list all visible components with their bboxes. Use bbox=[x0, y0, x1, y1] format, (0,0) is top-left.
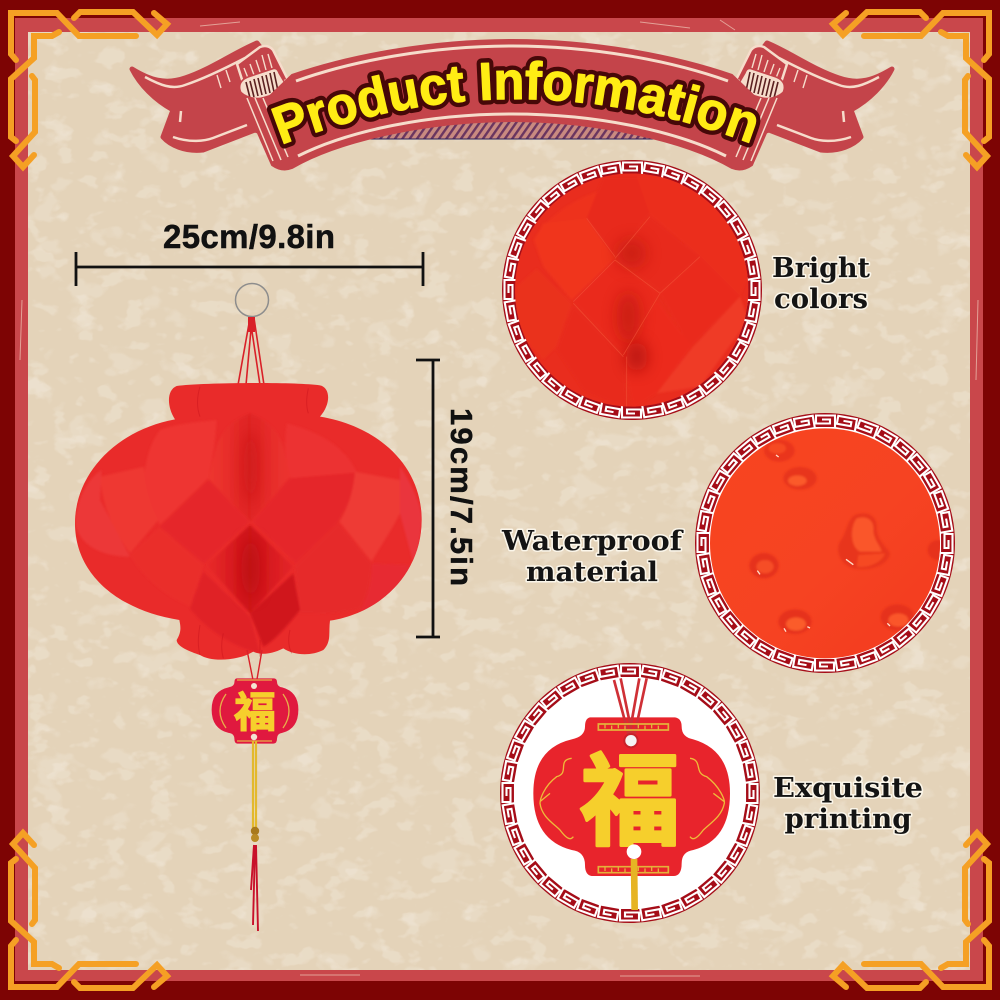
width dimension: line and label: 25cm/9.8in bbox=[163, 218, 335, 255]
corner ornament: top left bbox=[11, 12, 167, 167]
title arc path bbox=[281, 99, 755, 145]
lantern bottom skirt folds bbox=[197, 387, 308, 658]
gold tassel cord bbox=[253, 741, 256, 828]
detail circle: exquisite printing bbox=[500, 663, 760, 923]
scroll ornaments bbox=[540, 758, 724, 839]
height dimension: line and label: 19cm/7.5in bbox=[444, 408, 479, 586]
label: waterproof material bbox=[501, 526, 685, 588]
gold beads bbox=[251, 827, 259, 842]
key pattern ring bbox=[502, 160, 762, 420]
title ribbon banner bbox=[130, 39, 894, 176]
honeycomb closeup bbox=[513, 173, 750, 410]
key strips bbox=[598, 724, 668, 873]
ribbon main band bbox=[240, 40, 784, 169]
title text: Product Information bbox=[271, 60, 756, 144]
label: bright colors: colors bbox=[774, 284, 868, 315]
label: bright colors: Bright bbox=[772, 253, 871, 284]
droplets bbox=[749, 440, 949, 634]
red tassel bbox=[251, 845, 258, 931]
white inner disc bbox=[515, 678, 745, 908]
bottom hole bbox=[627, 844, 641, 859]
ribbon shadow hatch bbox=[370, 120, 654, 139]
small fortune tag with tassel bbox=[212, 650, 298, 931]
top hole bbox=[624, 734, 638, 747]
corner ornament: bottom right bbox=[833, 833, 989, 988]
detail circle: bright colors bbox=[502, 160, 762, 420]
ribbon right tail and roll bbox=[724, 43, 892, 150]
lantern facets bbox=[75, 413, 422, 653]
label: exquisite printing: printing bbox=[784, 804, 912, 835]
small tag hole bottom bbox=[251, 734, 257, 740]
enlarged fortune tag bbox=[533, 678, 730, 910]
title text: Product Information bbox=[266, 56, 760, 149]
detail circle: waterproof bbox=[695, 413, 955, 673]
label: exquisite printing bbox=[773, 773, 923, 835]
label: bright colors bbox=[772, 253, 871, 315]
label: waterproof material: Waterproof bbox=[501, 526, 685, 557]
small tag hole top bbox=[251, 683, 257, 689]
small tag character: 福 bbox=[234, 679, 276, 740]
gold tassel bbox=[624, 859, 645, 910]
width dimension: line and label bbox=[76, 218, 423, 286]
corner ornament: top right bbox=[833, 12, 989, 167]
fu character: 福 bbox=[580, 721, 680, 866]
red honeycomb lantern bbox=[75, 383, 422, 660]
small tag body bbox=[212, 678, 298, 744]
corner ornament: bottom left bbox=[11, 833, 167, 988]
hanging cords bbox=[614, 678, 647, 740]
key pattern ring bbox=[500, 663, 760, 923]
label: exquisite printing: Exquisite bbox=[773, 773, 923, 804]
height dimension: line and label bbox=[416, 360, 479, 637]
key pattern ring bbox=[695, 413, 955, 673]
label: waterproof material: material bbox=[526, 557, 658, 588]
lantern silhouette bbox=[75, 383, 422, 660]
tag cords bbox=[247, 650, 262, 685]
ribbon left tail and roll bbox=[132, 43, 300, 150]
small tag scrolls bbox=[220, 680, 289, 741]
wet surface closeup bbox=[707, 427, 949, 663]
hanging ring and cords bbox=[236, 284, 268, 385]
